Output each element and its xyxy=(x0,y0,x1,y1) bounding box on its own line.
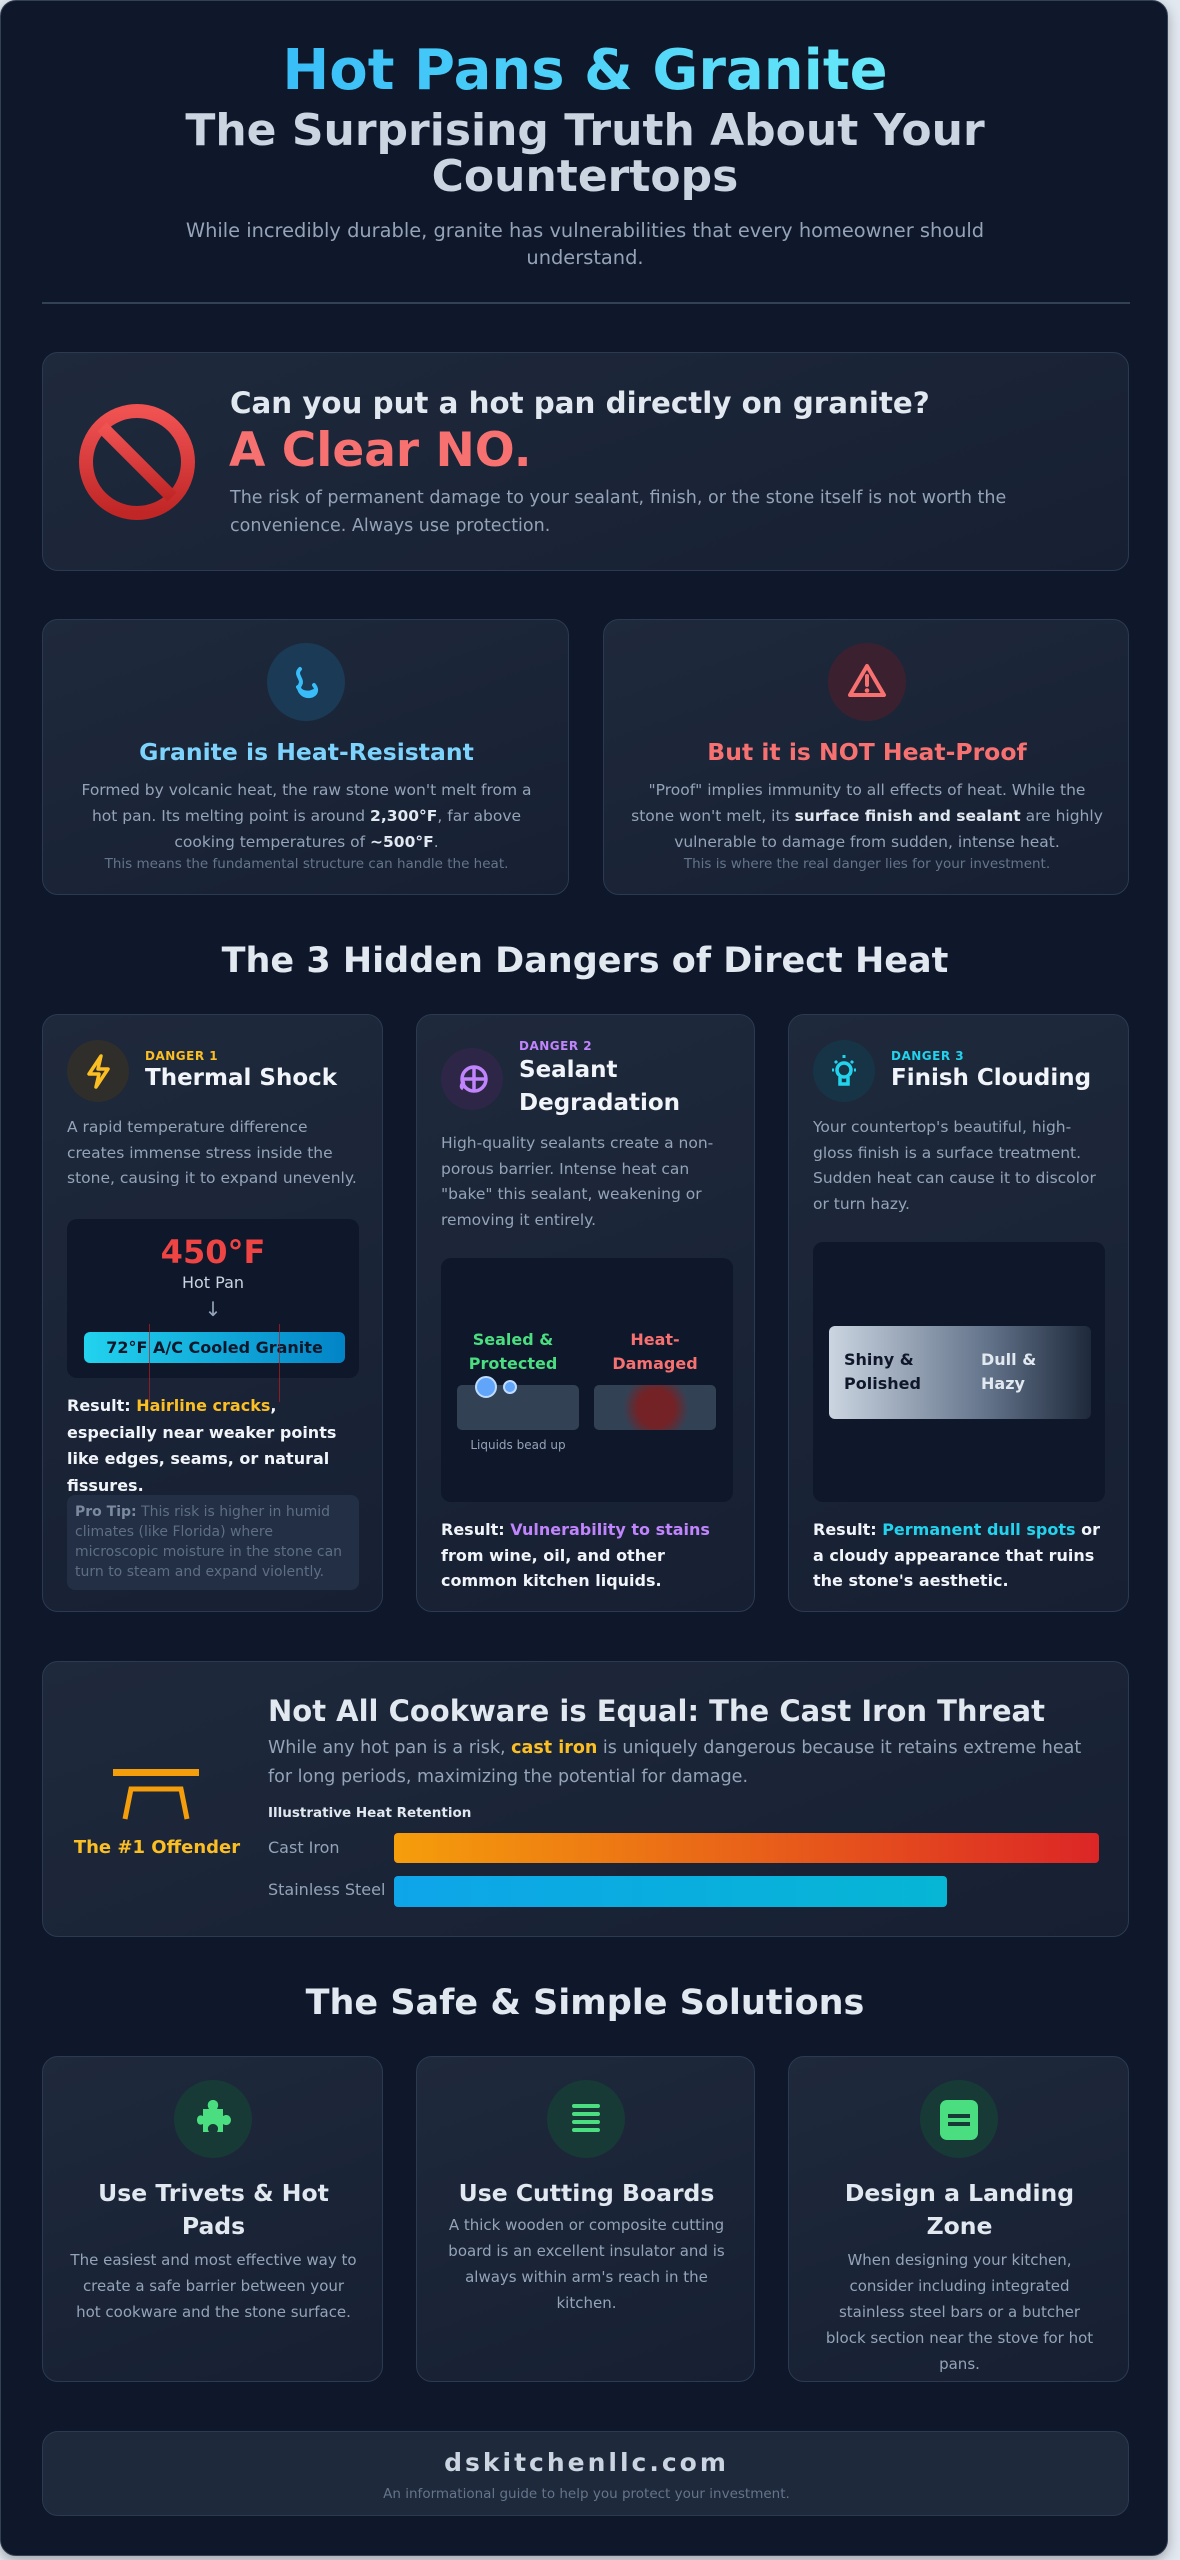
visual: thermal: 450°F xyxy=(161,1233,265,1271)
icon: prohibited xyxy=(79,404,195,520)
visual: thermal xyxy=(67,1219,359,1378)
visual: finish: Shiny & xyxy=(844,1350,914,1369)
body: A thick wooden or composite cutting board is an excellent insulator and is always within arm's reach in the kitchen. xyxy=(448,2216,725,2312)
icon: puzzle xyxy=(174,2080,252,2158)
panel: cutting boards xyxy=(416,2056,755,2382)
note: This means the fundamental structure can handle the heat. xyxy=(105,856,508,872)
panel: heat resistant xyxy=(42,619,569,895)
label: DANGER 1 xyxy=(145,1049,218,1063)
heading: Design a Landing Zone xyxy=(845,2179,1074,2240)
label: DANGER 3 xyxy=(891,1049,964,1063)
offender label: The #1 Offender xyxy=(74,1837,240,1858)
icon: lightning xyxy=(67,1040,129,1102)
body: A rapid temperature difference creates immense stress inside the stone, causing it to expand unevenly. xyxy=(67,1118,357,1187)
result: Result: Permanent dull spots or a cloudy appearance that ruins the stone's aesthetic. xyxy=(813,1520,1100,1590)
icon: lines xyxy=(547,2080,625,2158)
visual: thermal: Hot Pan xyxy=(182,1273,244,1292)
icon: lightbulb xyxy=(813,1040,875,1102)
visual: finish: Dull & xyxy=(981,1350,1036,1369)
pro tip: Pro Tip: This risk is higher in humid climates (like Florida) where microscopic moisture in the stone can turn to steam and expand violently. xyxy=(75,1504,342,1580)
visual: sealant: Sealed & Protected xyxy=(469,1330,557,1373)
visual: sealant xyxy=(441,1258,733,1502)
question: Can you put a hot pan directly on granite? xyxy=(230,386,930,420)
heading: Granite is Heat-Resistant xyxy=(139,738,474,766)
panel: landing zone xyxy=(788,2056,1129,2382)
visual: finish xyxy=(813,1242,1105,1502)
panel: danger 1 xyxy=(42,1014,383,1612)
site name: dskitchenllc.com xyxy=(444,2448,729,2477)
heading: Use Trivets & Hot Pads xyxy=(98,2179,329,2240)
title: Hot Pans & Granite xyxy=(282,38,888,103)
icon: pan xyxy=(113,1769,199,1820)
icon: flame xyxy=(267,643,345,721)
panel: trivets xyxy=(42,2056,383,2382)
heading: Not All Cookware is Equal: The Cast Iron Threat xyxy=(268,1694,1045,1728)
result: Result: Hairline cracks, especially near weaker points like edges, seams, or natural fissures. xyxy=(67,1396,336,1494)
visual: thermal: ↓ xyxy=(205,1297,221,1321)
panel: cast iron xyxy=(42,1661,1129,1937)
explanation: The risk of permanent damage to your sealant, finish, or the stone itself is not worth the convenience. Always use protection. xyxy=(230,488,1006,536)
bar chart xyxy=(268,1805,1099,1907)
bar chart: Stainless Steel xyxy=(268,1880,385,1899)
icon: warning xyxy=(828,643,906,721)
visual: finish: Hazy xyxy=(981,1374,1025,1393)
panel: clear no xyxy=(42,352,1129,571)
result: Result: Vulnerability to stains from wine, oil, and other common kitchen liquids. xyxy=(441,1520,710,1590)
heading: Sealant Degradation xyxy=(519,1057,680,1116)
heading: Finish Clouding xyxy=(891,1065,1091,1091)
visual: sealant: Liquids bead up xyxy=(470,1438,566,1452)
answer: A Clear NO. xyxy=(229,423,532,478)
heading: solutions: The Safe & Simple Solutions xyxy=(306,1983,864,2023)
body: Your countertop's beautiful, high-gloss finish is a surface treatment. Sudden heat can cause it to discolor or turn hazy. xyxy=(813,1118,1096,1212)
panel: danger 2 xyxy=(416,1014,755,1612)
footer xyxy=(42,2431,1129,2516)
bar chart: Illustrative Heat Retention xyxy=(268,1805,471,1821)
bar chart: Cast Iron xyxy=(268,1838,340,1857)
heading: Thermal Shock xyxy=(145,1065,337,1091)
body: The easiest and most effective way to create a safe barrier between your hot cookware and the stone surface. xyxy=(70,2251,357,2321)
panel: danger 3 xyxy=(788,1014,1129,1612)
subtitle: The Surprising Truth About Your Countertops xyxy=(185,105,985,202)
icon: block xyxy=(920,2080,998,2158)
note: This is where the real danger lies for your investment. xyxy=(684,856,1050,872)
visual: thermal: 72°F A/C Cooled Granite xyxy=(106,1338,323,1357)
body: High-quality sealants create a non-porous barrier. Intense heat can "bake" this sealant, weakening or removing it entirely. xyxy=(441,1134,713,1228)
panel: not heat proof xyxy=(603,619,1129,895)
body: When designing your kitchen, consider including integrated stainless steel bars or a butcher block section near the stove for hot pans. xyxy=(826,2251,1093,2373)
visual: finish: Polished xyxy=(844,1374,921,1393)
label: DANGER 2 xyxy=(519,1039,592,1053)
heading: But it is NOT Heat-Proof xyxy=(707,738,1027,766)
intro text: While incredibly durable, granite has vulnerabilities that every homeowner should understand. xyxy=(186,219,984,269)
body: Formed by volcanic heat, the raw stone won't melt from a hot pan. Its melting point is around 2,300°F, far above cooking temperatures of ~500°F. xyxy=(81,781,532,851)
heading: Use Cutting Boards xyxy=(459,2179,714,2207)
heading: dangers: The 3 Hidden Dangers of Direct Heat xyxy=(222,941,948,981)
icon: sealant xyxy=(441,1048,503,1110)
visual: sealant: Heat-Damaged xyxy=(612,1330,698,1373)
body: "Proof" implies immunity to all effects of heat. While the stone won't melt, its surface finish and sealant are highly vulnerable to damage from sudden, intense heat. xyxy=(631,781,1103,851)
body: While any hot pan is a risk, cast iron is uniquely dangerous because it retains extreme heat for long periods, maximizing the potential for damage. xyxy=(268,1738,1081,1787)
tagline: An informational guide to help you protect your investment. xyxy=(383,2486,790,2502)
